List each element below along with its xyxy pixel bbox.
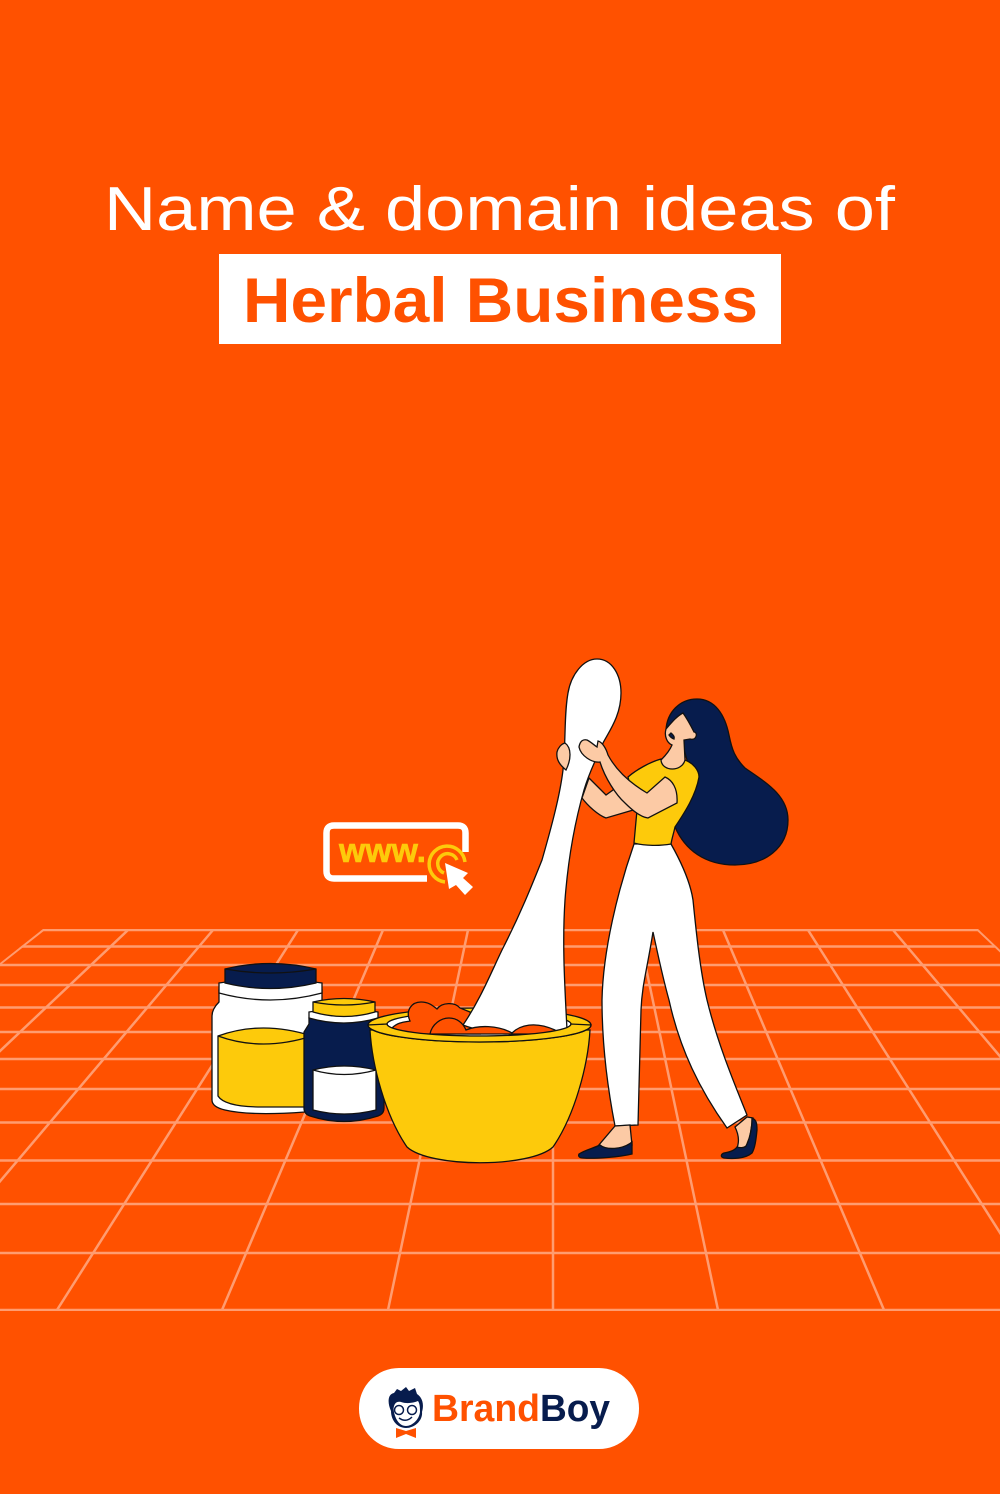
pestle [463,659,621,1033]
hand on pestle [557,743,570,770]
BrandBoy logo badge [359,1368,639,1449]
title: Name & domain ideas of [104,175,896,244]
trousers [602,844,747,1128]
perspective floor grid [0,930,1000,1310]
herbs in bowl [392,1002,480,1034]
large jar with yellow liquid [212,964,322,1114]
feet and shoes [598,1125,632,1152]
neck and face [661,713,696,769]
front herbs [430,1018,555,1034]
title [104,175,896,344]
back arm [582,778,640,818]
www domain icon [326,826,473,895]
logo mascot [389,1387,423,1438]
shirt [628,759,699,845]
front arm [579,740,677,818]
mortar bowl with herbs [368,659,621,1163]
bowl front rim [368,1024,591,1042]
woman holding the pestle [557,699,788,1158]
small navy jar [304,998,384,1122]
hair [666,699,788,865]
www domain icon: www. [338,832,426,870]
BrandBoy logo badge: Brand [432,1388,540,1430]
BrandBoy logo badge: Boy [540,1388,610,1430]
title: Herbal Business [243,266,758,336]
